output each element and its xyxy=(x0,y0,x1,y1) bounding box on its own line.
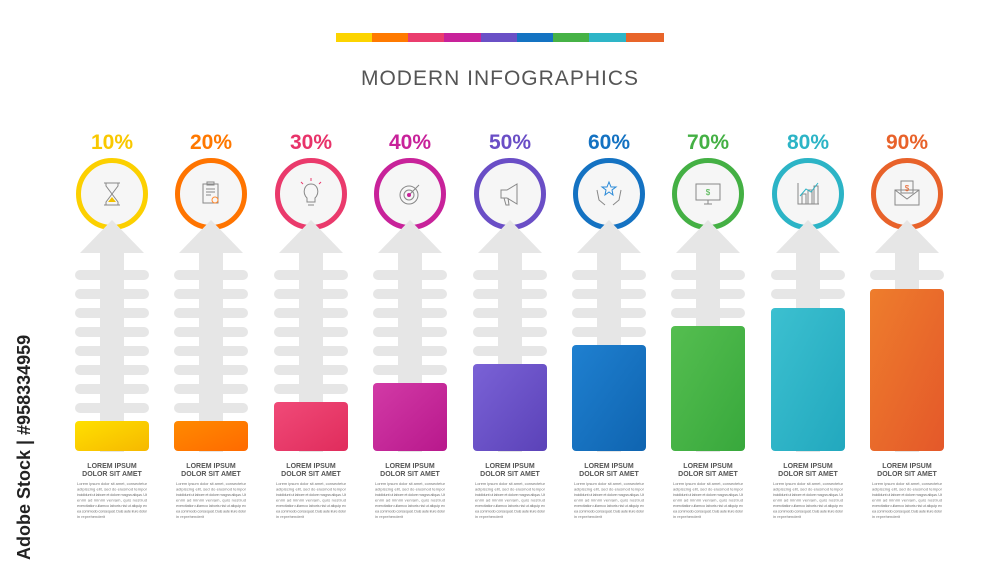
text block: adipiscing elit, sed do eiusmod tempor xyxy=(375,486,446,492)
text block: DOLOR SIT AMET xyxy=(579,471,640,478)
text block: enim ad minim veniam, quis nostrud xyxy=(574,498,644,502)
side watermark text: Adobe Stock | #958334959 xyxy=(14,335,34,560)
color strip xyxy=(336,33,664,42)
text block: DOLOR SIT AMET xyxy=(82,471,143,478)
text block: ea commodo consequat. Duis aute irure dolor xyxy=(574,508,645,514)
text block: exercitation ullamco laboris nisi ut aliquip ex xyxy=(773,503,843,508)
percentage: 60% xyxy=(588,131,630,154)
text block: Lorem ipsum dolor sit amet, consectetur xyxy=(475,481,546,486)
icon circle: envelope xyxy=(874,160,940,228)
text block: enim ad minim veniam, quis nostrud xyxy=(176,498,246,502)
text block: LOREM IPSUM xyxy=(385,463,435,470)
column 2 xyxy=(174,131,248,519)
text block: adipiscing elit, sed do eiusmod tempor xyxy=(574,486,645,492)
bar xyxy=(671,326,745,451)
text block: ea commodo consequat. Duis aute irure dolor xyxy=(77,508,148,514)
text block: ea commodo consequat. Duis aute irure dolor xyxy=(375,508,446,514)
arrow and stripes xyxy=(473,220,547,452)
text block: LOREM IPSUM xyxy=(584,463,634,470)
text block: DOLOR SIT AMET xyxy=(778,471,839,478)
arrow and stripes xyxy=(870,220,944,452)
text block: LOREM IPSUM xyxy=(186,463,236,470)
text block: enim ad minim veniam, quis nostrud xyxy=(673,498,743,502)
text block: incididunt ut labore et dolore magna aliqua. Ut xyxy=(375,492,446,497)
text block: adipiscing elit, sed do eiusmod tempor xyxy=(773,486,844,492)
text block: LOREM IPSUM xyxy=(882,463,932,470)
arrow and stripes xyxy=(174,220,248,452)
text block: ea commodo consequat. Duis aute irure dolor xyxy=(872,508,943,514)
percentage: 20% xyxy=(190,131,232,154)
bar xyxy=(572,345,646,451)
text block: incididunt ut labore et dolore magna aliqua. Ut xyxy=(574,492,645,497)
text block: in reprehenderit xyxy=(872,514,901,519)
column 4 xyxy=(373,131,447,519)
text block: in reprehenderit xyxy=(77,514,106,519)
percentage: 30% xyxy=(290,131,332,154)
text block xyxy=(872,463,943,519)
text block: LOREM IPSUM xyxy=(87,463,137,470)
percentage: 10% xyxy=(91,131,133,154)
text block: DOLOR SIT AMET xyxy=(480,471,541,478)
text block: incididunt ut labore et dolore magna aliqua. Ut xyxy=(176,492,247,497)
icon circle: chart xyxy=(774,160,842,228)
percentage: 40% xyxy=(389,131,431,154)
column 1 xyxy=(75,131,149,519)
text block: enim ad minim veniam, quis nostrud xyxy=(872,498,942,502)
icon circle: bulb xyxy=(278,160,344,228)
text block xyxy=(276,463,347,519)
text block: incididunt ut labore et dolore magna aliqua. Ut xyxy=(773,492,844,497)
icon circle: envelope: $ xyxy=(905,184,910,193)
text block: exercitation ullamco laboris nisi ut aliquip ex xyxy=(375,503,445,508)
text block: adipiscing elit, sed do eiusmod tempor xyxy=(77,486,148,492)
arrow and stripes xyxy=(771,220,845,452)
bar xyxy=(373,383,447,451)
text block: ea commodo consequat. Duis aute irure dolor xyxy=(475,508,546,514)
text block: DOLOR SIT AMET xyxy=(678,471,739,478)
text block: adipiscing elit, sed do eiusmod tempor xyxy=(872,486,943,492)
column 8 xyxy=(771,131,845,519)
text block: ea commodo consequat. Duis aute irure dolor xyxy=(773,508,844,514)
text block: enim ad minim veniam, quis nostrud xyxy=(475,498,545,502)
text block: enim ad minim veniam, quis nostrud xyxy=(773,498,843,502)
text block: Lorem ipsum dolor sit amet, consectetur xyxy=(276,481,347,486)
text block: DOLOR SIT AMET xyxy=(181,471,242,478)
text block: Lorem ipsum dolor sit amet, consectetur xyxy=(375,481,446,486)
icon circle: monitor dollar: $ xyxy=(706,188,711,197)
text block: exercitation ullamco laboris nisi ut aliquip ex xyxy=(77,503,147,508)
bar xyxy=(771,308,845,451)
arrow and stripes xyxy=(274,220,348,452)
arrow and stripes xyxy=(572,220,646,452)
column 5 xyxy=(473,131,547,519)
icon circle: monitor dollar xyxy=(674,160,742,228)
text block: in reprehenderit xyxy=(574,514,603,519)
text block: adipiscing elit, sed do eiusmod tempor xyxy=(276,486,347,492)
column 3 xyxy=(274,131,348,519)
icon circle: target xyxy=(376,160,444,228)
bar xyxy=(75,421,149,451)
text block: ea commodo consequat. Duis aute irure dolor xyxy=(673,508,744,514)
text block: Lorem ipsum dolor sit amet, consectetur xyxy=(673,481,744,486)
text block: DOLOR SIT AMET xyxy=(877,471,938,478)
text block: enim ad minim veniam, quis nostrud xyxy=(276,498,346,502)
title: MODERN INFOGRAPHICS xyxy=(361,67,639,90)
text block: ea commodo consequat. Duis aute irure dolor xyxy=(176,508,247,514)
text block: exercitation ullamco laboris nisi ut aliquip ex xyxy=(574,503,644,508)
text block xyxy=(176,463,247,519)
text block: ea commodo consequat. Duis aute irure dolor xyxy=(276,508,347,514)
text block: Lorem ipsum dolor sit amet, consectetur xyxy=(872,481,943,486)
text block: in reprehenderit xyxy=(773,514,802,519)
text block: LOREM IPSUM xyxy=(485,463,535,470)
text block: incididunt ut labore et dolore magna aliqua. Ut xyxy=(872,492,943,497)
text block xyxy=(77,463,148,519)
icon circle: clipboard xyxy=(178,160,244,228)
text block: exercitation ullamco laboris nisi ut aliquip ex xyxy=(276,503,346,508)
text block xyxy=(773,463,844,519)
text block: enim ad minim veniam, quis nostrud xyxy=(375,498,445,502)
text block: LOREM IPSUM xyxy=(683,463,733,470)
text block: adipiscing elit, sed do eiusmod tempor xyxy=(176,486,247,492)
icon circle: hourglass xyxy=(78,160,146,228)
percentage: 70% xyxy=(687,131,729,154)
text block: Lorem ipsum dolor sit amet, consectetur xyxy=(574,481,645,486)
text block: exercitation ullamco laboris nisi ut aliquip ex xyxy=(872,503,942,508)
text block: DOLOR SIT AMET xyxy=(281,471,342,478)
text block: LOREM IPSUM xyxy=(286,463,336,470)
column 7 xyxy=(671,131,745,519)
bar xyxy=(473,364,547,451)
text block xyxy=(574,463,645,519)
text block: in reprehenderit xyxy=(673,514,702,519)
bar xyxy=(274,402,348,451)
bar xyxy=(174,421,248,451)
text block: incididunt ut labore et dolore magna aliqua. Ut xyxy=(673,492,744,497)
text block: incididunt ut labore et dolore magna aliqua. Ut xyxy=(276,492,347,497)
icon circle: megaphone xyxy=(476,160,544,228)
percentage: 80% xyxy=(787,131,829,154)
text block: LOREM IPSUM xyxy=(783,463,833,470)
arrow and stripes xyxy=(75,220,149,452)
text block xyxy=(475,463,546,519)
arrow and stripes xyxy=(671,220,745,452)
text block xyxy=(375,463,446,519)
text block: Lorem ipsum dolor sit amet, consectetur xyxy=(77,481,148,486)
arrow and stripes xyxy=(373,220,447,452)
text block: adipiscing elit, sed do eiusmod tempor xyxy=(475,486,546,492)
text block: in reprehenderit xyxy=(276,514,305,519)
column 9 xyxy=(870,131,944,519)
column 6 xyxy=(572,131,646,519)
text block: incididunt ut labore et dolore magna aliqua. Ut xyxy=(77,492,148,497)
text block: in reprehenderit xyxy=(475,514,504,519)
icon circle: hands with star xyxy=(576,160,642,228)
text block: in reprehenderit xyxy=(176,514,205,519)
text block: Lorem ipsum dolor sit amet, consectetur xyxy=(773,481,844,486)
text block: exercitation ullamco laboris nisi ut aliquip ex xyxy=(673,503,743,508)
text block: DOLOR SIT AMET xyxy=(380,471,441,478)
text block: Lorem ipsum dolor sit amet, consectetur xyxy=(176,481,247,486)
text block xyxy=(673,463,744,519)
bar xyxy=(870,289,944,451)
text block: exercitation ullamco laboris nisi ut aliquip ex xyxy=(176,503,246,508)
text block: enim ad minim veniam, quis nostrud xyxy=(77,498,147,502)
text block: in reprehenderit xyxy=(375,514,404,519)
text block: adipiscing elit, sed do eiusmod tempor xyxy=(673,486,744,492)
percentage: 90% xyxy=(886,131,928,154)
text block: exercitation ullamco laboris nisi ut aliquip ex xyxy=(475,503,545,508)
text block: incididunt ut labore et dolore magna aliqua. Ut xyxy=(475,492,546,497)
percentage: 50% xyxy=(489,131,531,154)
